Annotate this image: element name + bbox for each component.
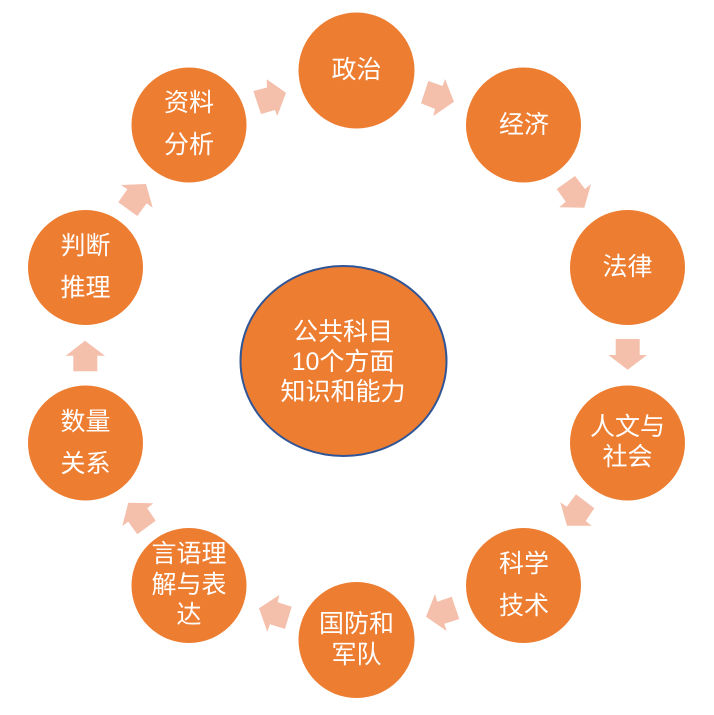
center circle: 知识和能力 xyxy=(280,378,406,406)
node: science and technology xyxy=(466,528,581,643)
node: judgment and reasoning: 推理 xyxy=(60,274,111,302)
node: quantitative relations xyxy=(28,386,143,500)
node: humanities and society: 社会 xyxy=(602,443,653,471)
node: economy xyxy=(466,68,581,182)
node: politics xyxy=(298,12,414,128)
node: economy: 经济 xyxy=(499,111,549,139)
arrow: quantitative to judgment xyxy=(66,341,105,371)
node: judgment and reasoning: 判断 xyxy=(60,232,111,260)
arrow: defense to language xyxy=(259,595,292,632)
node: quantitative relations: 数量 xyxy=(60,408,111,436)
center circle: 公共科目 xyxy=(293,318,393,346)
node: national defense and military xyxy=(298,582,414,698)
node: politics: 政治 xyxy=(331,56,382,84)
node: judgment and reasoning xyxy=(28,210,143,325)
arrow: science to defense xyxy=(426,594,459,631)
arrow: law to humanities xyxy=(608,339,647,370)
node: humanities and society: 人文与 xyxy=(590,413,665,441)
node: data analysis: 分析 xyxy=(164,131,214,159)
node: language comprehension xyxy=(132,528,246,643)
arrow: language to quantitative xyxy=(122,503,156,534)
node: science and technology: 科学 xyxy=(499,550,549,578)
arrow: data analysis to politics xyxy=(253,79,286,116)
node: humanities and society xyxy=(570,386,685,500)
center circle xyxy=(240,266,446,456)
node: science and technology: 技术 xyxy=(499,592,549,620)
node: quantitative relations: 关系 xyxy=(60,450,111,478)
node: law xyxy=(570,210,685,325)
node: data analysis: 资料 xyxy=(164,89,214,117)
node: language comprehension: 达 xyxy=(176,601,202,629)
node: language comprehension: 言语理 xyxy=(151,540,227,568)
arrow: humanities to science xyxy=(560,494,594,526)
node: language comprehension: 解与表 xyxy=(151,571,227,599)
arrow: politics to economy xyxy=(421,79,454,116)
node: data analysis xyxy=(132,68,246,182)
node: national defense and military: 国防和 xyxy=(319,610,394,638)
center circle: 10个方面 xyxy=(292,348,394,376)
node: national defense and military: 军队 xyxy=(331,641,382,669)
arrow: economy to law xyxy=(557,176,591,208)
node: law: 法律 xyxy=(602,253,653,281)
arrow: judgment to data analysis xyxy=(118,184,153,216)
